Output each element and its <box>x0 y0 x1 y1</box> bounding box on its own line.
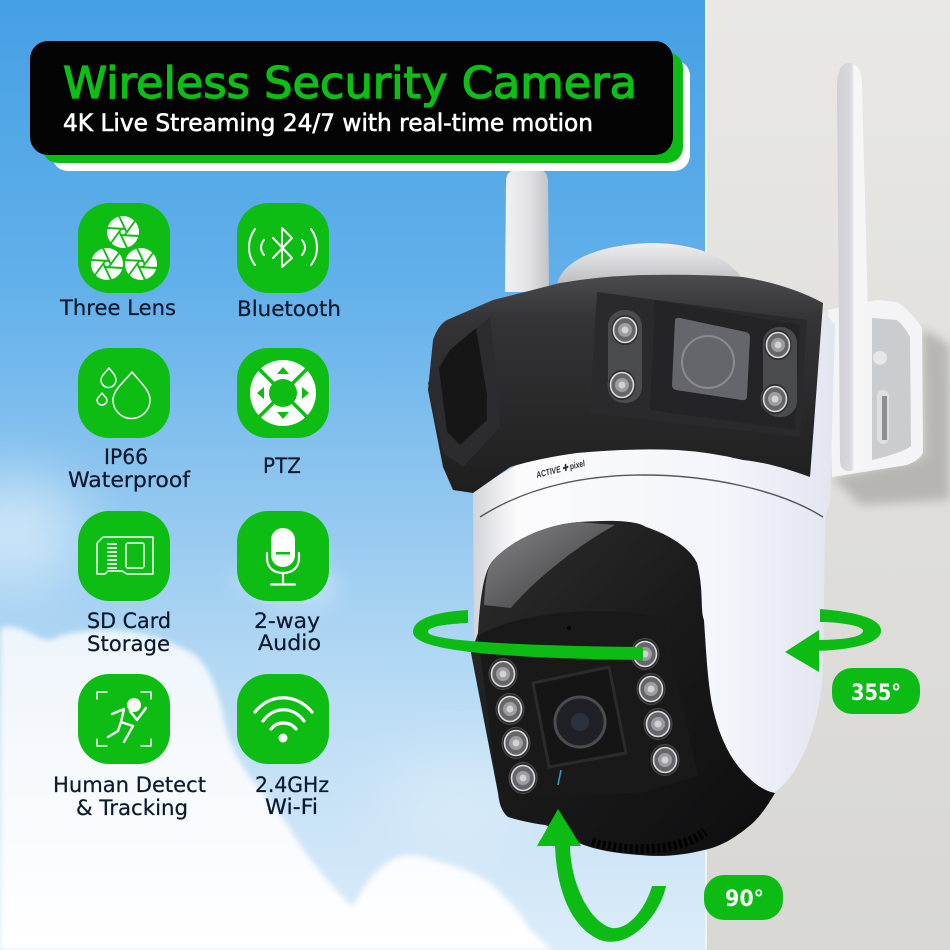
lens square <box>533 667 626 767</box>
arrow: horizontal rotation ring left <box>413 610 643 660</box>
label: 355 degrees: 355° <box>851 681 901 706</box>
feature: PTZ: PTZ <box>263 454 301 479</box>
subtitle: 4K Live Streaming 24/7 with real-time motion <box>63 109 593 137</box>
feature: Human Detect and Tracking: Human Detect <box>53 773 206 798</box>
LED columns <box>489 658 517 690</box>
title: Wireless Security Camera <box>63 58 637 109</box>
feature: SD Card Storage: Storage <box>87 632 170 657</box>
feature: Human Detect and Tracking: & Tracking <box>76 796 188 821</box>
dome highlight <box>484 522 615 608</box>
feature: 2.4GHz Wi-Fi <box>237 674 329 820</box>
right antenna <box>837 63 872 471</box>
arrow: horizontal rotation right <box>785 609 881 672</box>
wall <box>705 0 950 950</box>
right LED pod <box>763 327 797 417</box>
feature: IP66 Waterproof <box>68 348 190 493</box>
left LED pod <box>608 310 642 403</box>
label: 355 degrees <box>832 668 920 714</box>
front recess <box>590 292 807 437</box>
feature: 2.4GHz Wi-Fi: Wi-Fi <box>265 795 318 820</box>
lens <box>555 697 605 747</box>
feature: 2-way Audio: Audio <box>258 631 321 656</box>
arrow: vertical tilt <box>537 809 666 942</box>
feature: SD Card Storage <box>78 511 171 657</box>
brand logo: ACTIVE ✚ pixel <box>534 458 586 480</box>
label: 90 degrees <box>704 875 783 920</box>
feature: 2-way Audio <box>237 511 329 656</box>
feature: IP66 Waterproof: IP66 <box>104 445 148 470</box>
feature: Three Lens: Three Lens <box>59 296 176 321</box>
camera head <box>471 521 775 856</box>
lens panel <box>672 318 750 400</box>
camera white body <box>473 310 835 792</box>
side lens module <box>428 317 500 467</box>
feature: Bluetooth <box>237 203 341 322</box>
feature: Human Detect and Tracking <box>53 674 206 821</box>
camera black band <box>428 275 823 493</box>
feature: Bluetooth: Bluetooth <box>237 297 341 322</box>
vent slots <box>592 832 705 849</box>
wall mount bracket <box>828 300 923 477</box>
feature: Three Lens <box>59 203 176 321</box>
front face <box>478 611 698 800</box>
label: 90 degrees: 90° <box>725 887 764 912</box>
left antenna <box>505 170 549 292</box>
feature: IP66 Waterproof: Waterproof <box>68 468 190 493</box>
feature: SD Card Storage: SD Card <box>87 609 171 634</box>
camera top dome <box>557 243 745 285</box>
feature: PTZ <box>237 348 329 479</box>
body seam line <box>480 475 823 517</box>
feature: 2.4GHz Wi-Fi: 2.4GHz <box>255 773 329 798</box>
feature: 2-way Audio: 2-way <box>254 609 320 634</box>
header banner <box>30 41 690 171</box>
